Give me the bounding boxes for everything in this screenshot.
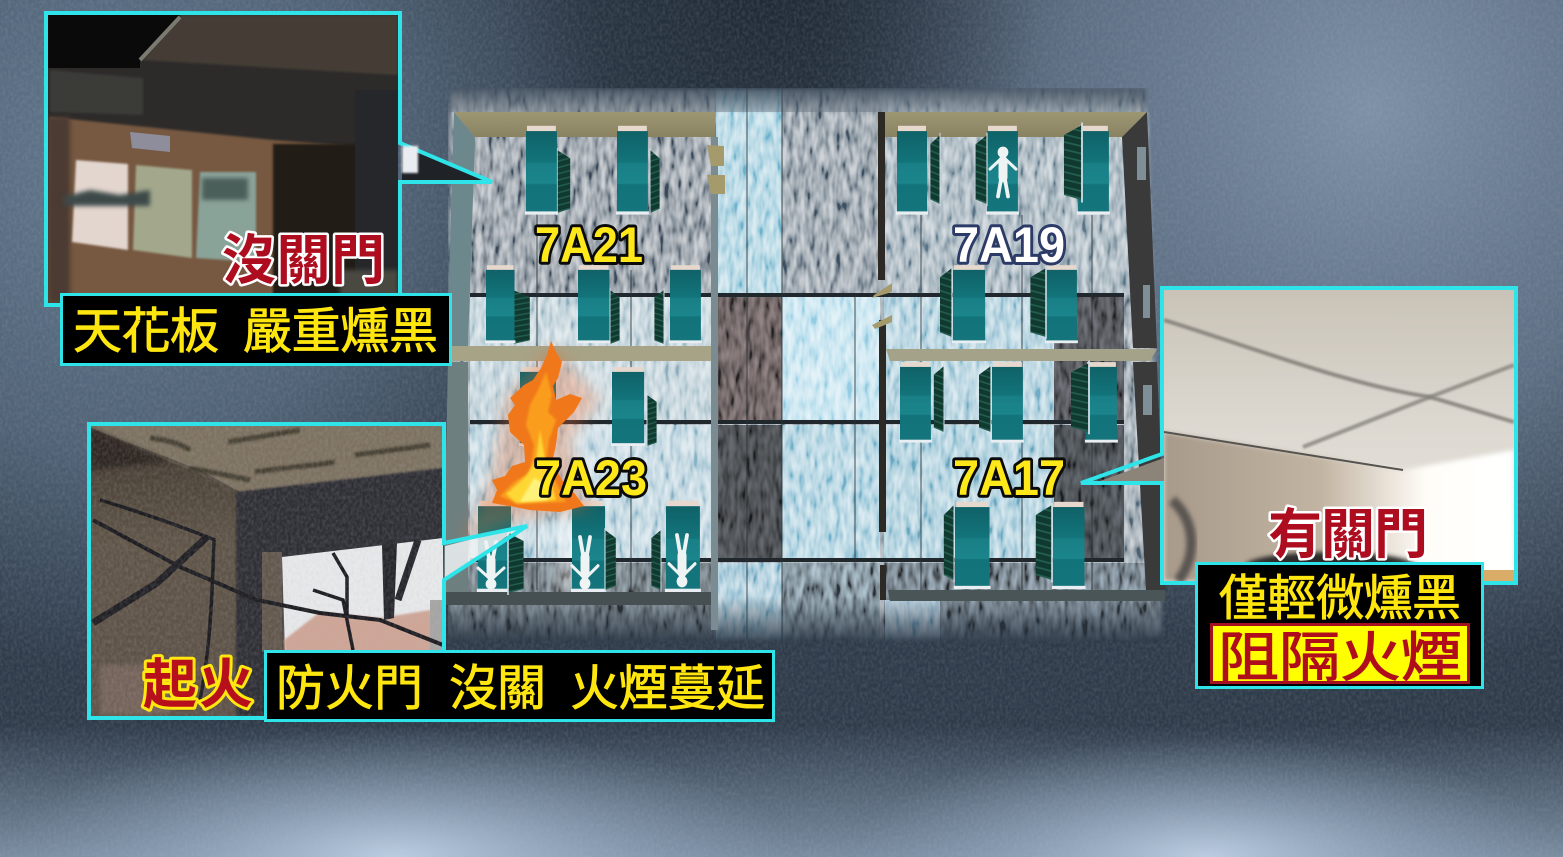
callout frame with pointer — [402, 146, 484, 180]
caption: fire door not closed, smoke spreads: 火煙蔓延 — [570, 662, 765, 716]
caption: only slight blackening, blocks fire and smoke: 僅輕微燻黑 — [1219, 572, 1461, 626]
caption: fire door not closed, smoke spreads: 沒關 — [449, 662, 546, 716]
caption: ceiling severely blackened: 天花板 — [73, 305, 219, 359]
walls — [443, 112, 1166, 630]
label: door closed: 有關門 — [1268, 505, 1428, 565]
floor surface — [446, 88, 1166, 653]
room label 7A21: 7A21 — [535, 217, 643, 273]
room label 7A19: 7A19 — [953, 217, 1065, 273]
caption: ceiling severely blackened — [62, 294, 450, 364]
callout frame with pointer — [1100, 458, 1164, 481]
label: door not closed: 沒關門 — [222, 231, 385, 291]
label: fire origin: 起火 — [143, 655, 253, 715]
highlight: blocks fire and smoke: 阻隔火煙 — [1218, 628, 1462, 688]
beds in room 7A21 — [485, 126, 702, 346]
callout frame with pointer — [445, 527, 520, 580]
callout panel: 7A17 lightly blackened ceiling photo — [1081, 288, 1516, 688]
caption: fire door not closed, smoke spreads: 防火門 — [276, 662, 423, 716]
icon: fire flames — [460, 341, 600, 545]
photo: burned room — [91, 426, 444, 716]
beds in room 7A17 — [899, 361, 1118, 589]
callout panel: 7A23 fire origin photo — [89, 424, 774, 720]
photo: blackened ceiling — [48, 15, 399, 305]
caption: ceiling severely blackened: 嚴重燻黑 — [243, 305, 438, 359]
floor plan: four rooms 7A21, 7A19, 7A23, 7A17 — [443, 88, 1166, 653]
callout panel: 7A21 smoke-blackened ceiling photo — [46, 13, 492, 364]
beds in room 7A19 with victim — [896, 122, 1110, 343]
room label 7A17: 7A17 — [953, 450, 1065, 506]
photo: clean ceiling — [1164, 290, 1514, 581]
room label 7A23: 7A23 — [535, 450, 647, 506]
caption: fire door not closed, smoke spreads — [266, 652, 774, 720]
beds in room 7A23 with victims — [477, 367, 701, 595]
caption: only slight blackening, blocks fire and smoke — [1196, 564, 1482, 688]
